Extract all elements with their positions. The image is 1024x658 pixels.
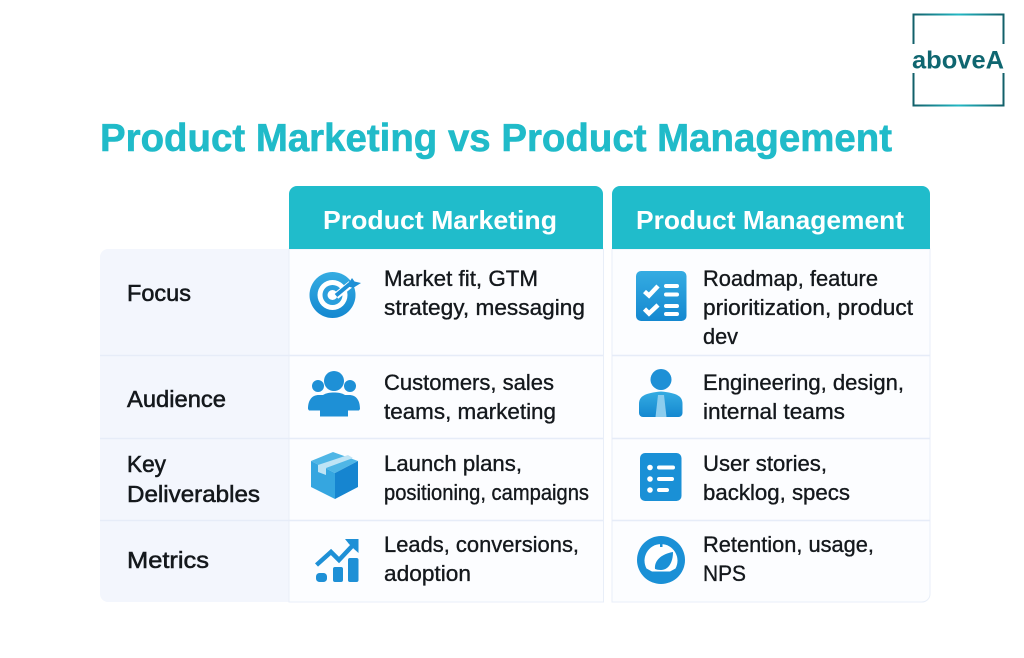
logo: aboveA (912, 14, 1004, 106)
icon: package box (311, 452, 358, 499)
text: marketing deliverables: Launch plans, (384, 451, 522, 476)
text: management focus: dev (703, 324, 738, 349)
text: marketing metrics (384, 532, 579, 586)
panel: product marketing column (289, 249, 604, 602)
text: marketing focus: strategy, messaging (384, 295, 585, 320)
icon: checklist (636, 271, 686, 321)
icon: person with tie (639, 369, 682, 417)
header: product marketing (289, 186, 603, 249)
text: marketing focus (384, 266, 585, 320)
text: marketing deliverables: positioning, campaigns (384, 480, 589, 505)
text: marketing metrics: Leads, conversions, (384, 532, 579, 557)
text: management focus: prioritization, product (703, 295, 913, 320)
logo: aboveA: aboveA (912, 46, 1004, 74)
row label: focus: Focus (127, 280, 191, 306)
icon: gauge with leaf (637, 536, 685, 584)
text: marketing audience: teams, marketing (384, 399, 556, 424)
text: marketing deliverables (384, 451, 589, 505)
text: marketing focus: Market fit, GTM (384, 266, 538, 291)
text: marketing audience (384, 370, 556, 424)
header: product management (612, 186, 930, 249)
header: product marketing: Product Marketing (323, 205, 557, 235)
icon: group of people (308, 371, 360, 416)
header: product management: Product Management (636, 205, 904, 235)
text: management focus (703, 266, 913, 349)
text: management focus: Roadmap, feature (703, 266, 878, 291)
row label: audience: Audience (127, 386, 226, 412)
row label: key deliverables: Key (127, 451, 166, 477)
text: management audience (703, 370, 904, 424)
panel: comparison table (100, 186, 930, 602)
panel: row label column (100, 249, 289, 602)
text: management metrics: NPS (703, 561, 746, 586)
text: management metrics: Retention, usage, (703, 532, 874, 557)
panel: product management column (612, 249, 930, 602)
text: management audience: Engineering, design, (703, 370, 904, 395)
text: marketing metrics: adoption (384, 561, 471, 586)
row label: metrics: Metrics (127, 547, 209, 573)
row label: key deliverables (127, 451, 260, 507)
icon: list document (640, 453, 682, 501)
title: Product Marketing vs Product Management (100, 117, 892, 160)
text: management deliverables: backlog, specs (703, 480, 850, 505)
text: management deliverables: User stories, (703, 451, 827, 476)
text: management deliverables (703, 451, 850, 505)
text: management audience: internal teams (703, 399, 845, 424)
icon: target with arrow (310, 272, 361, 318)
text: marketing audience: Customers, sales (384, 370, 554, 395)
text: management metrics (703, 532, 874, 586)
icon: growth chart (316, 539, 358, 582)
row label: key deliverables: Deliverables (127, 481, 260, 507)
